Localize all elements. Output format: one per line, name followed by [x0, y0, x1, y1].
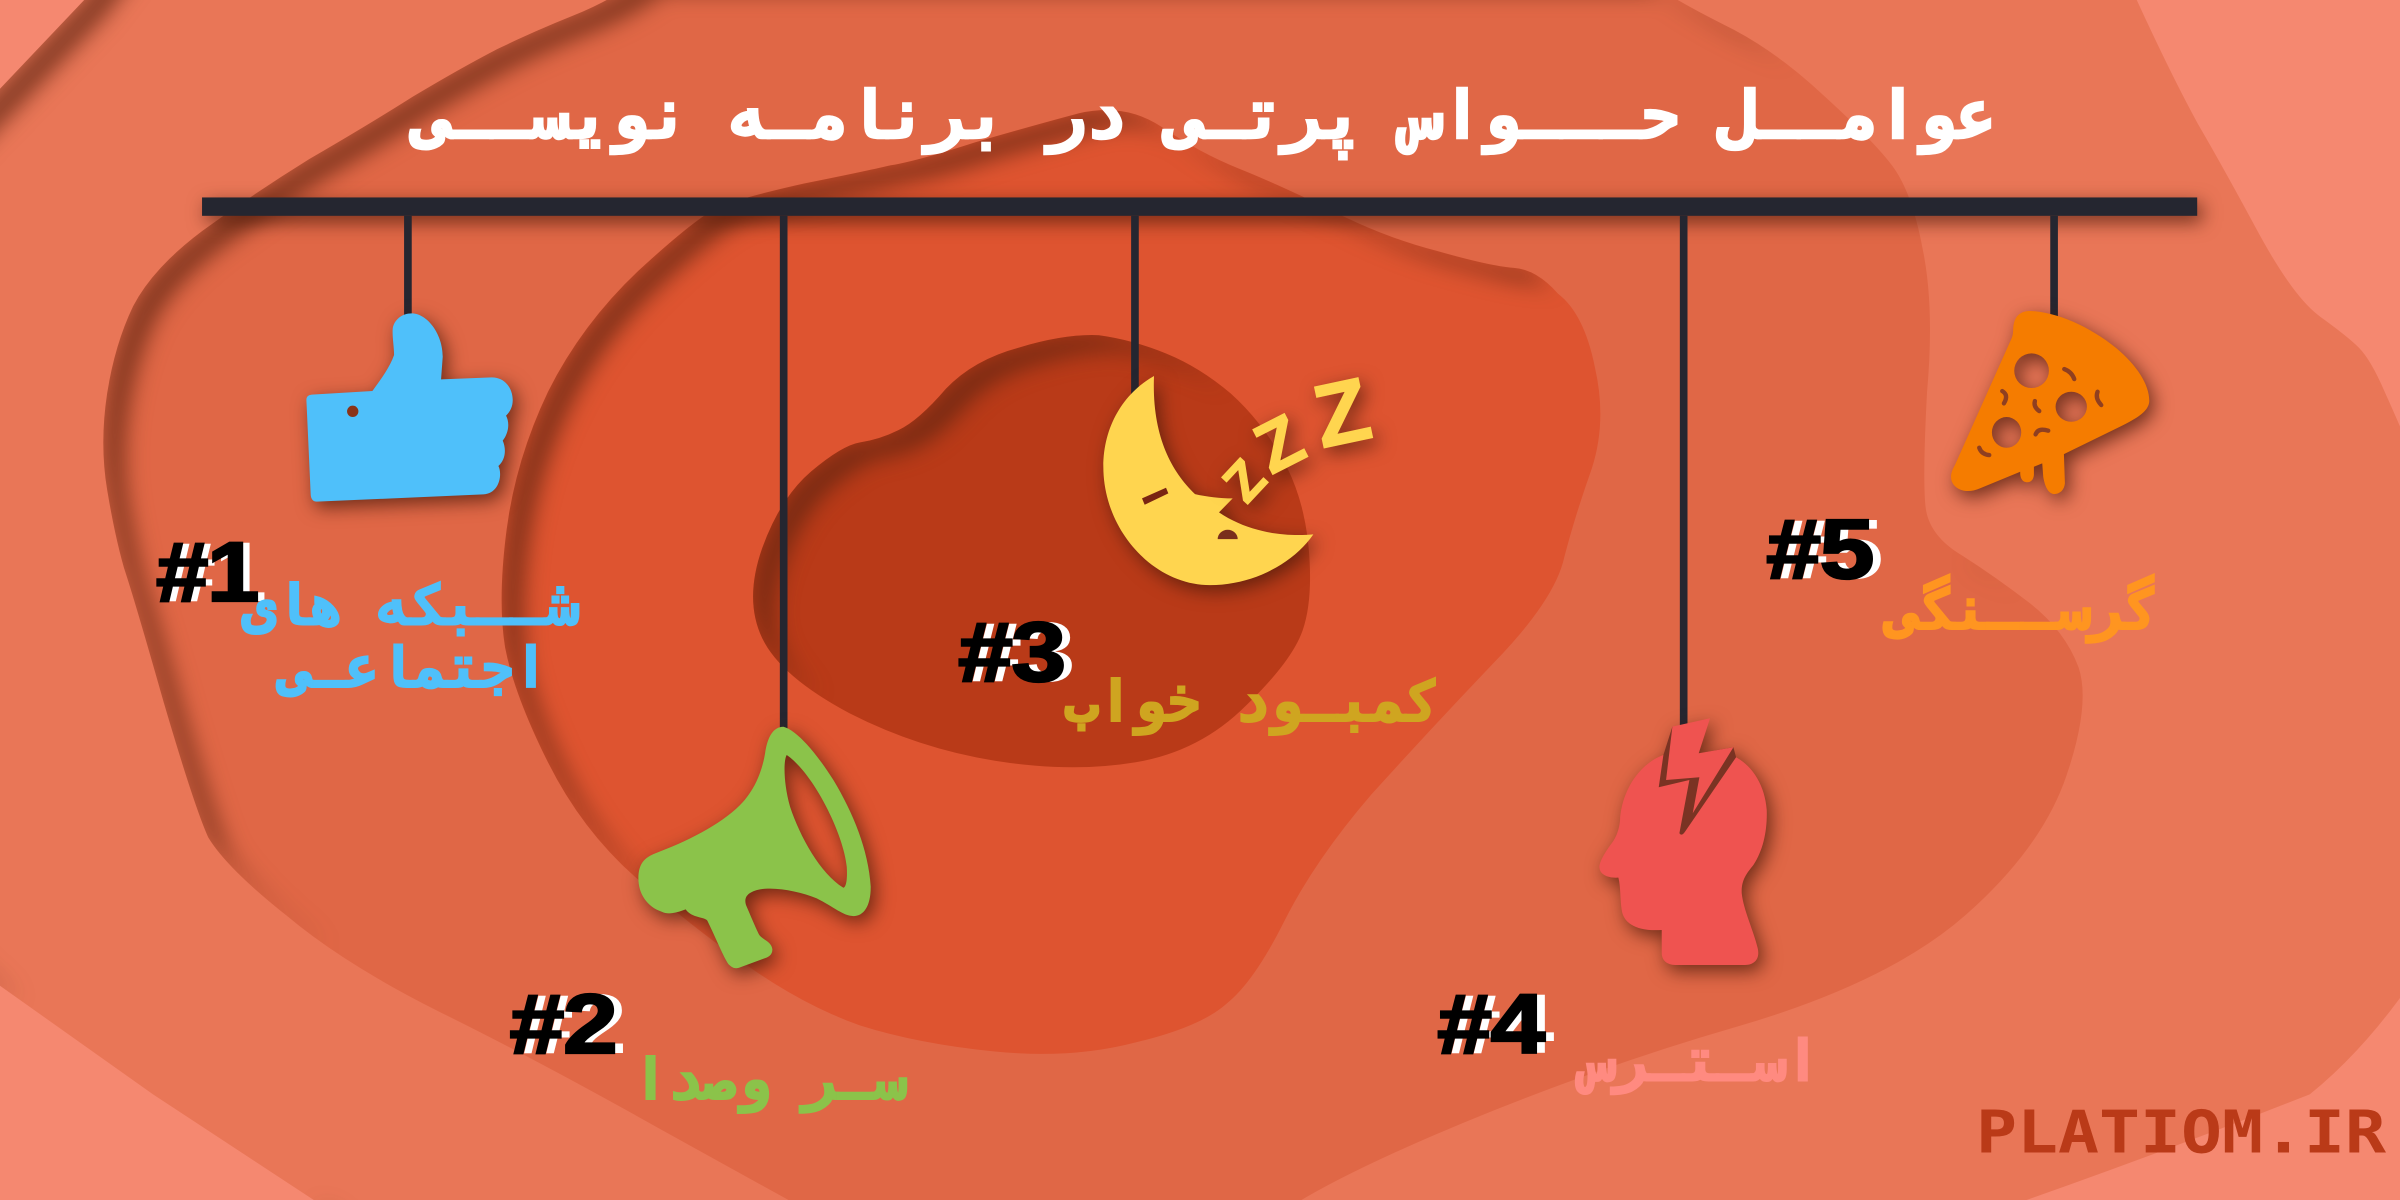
icon: thumbs up	[306, 313, 513, 502]
hanging strings	[404, 216, 2058, 729]
number 1: #1	[155, 524, 259, 619]
number 5: #5	[1765, 502, 1874, 596]
number 2: #2	[508, 978, 618, 1071]
icon: pizza slice	[1951, 311, 2149, 494]
moon crescent	[1103, 376, 1313, 585]
sleep letters: Z	[1242, 398, 1316, 488]
label 4: اسـتـرس	[1575, 1029, 1820, 1095]
hanging bar	[202, 197, 2197, 216]
label 5: گرســنگی	[1883, 574, 2158, 643]
label 1: اجتماعـی	[276, 636, 548, 701]
icon: megaphone	[638, 727, 871, 968]
number 5: #5	[1774, 502, 1884, 596]
sleep letters	[1212, 359, 1379, 513]
sleep letters: Z	[1305, 359, 1379, 467]
label 2: سـر وصدا	[634, 1047, 907, 1113]
watermark: PLATIOM.IR	[1976, 1098, 2387, 1166]
title: عوامــل حـــواس پرتـی در برنامـه نویســی	[409, 77, 1997, 160]
label 1	[242, 573, 579, 701]
panel: paper layer 4	[502, 110, 1600, 1054]
label 1: شــبکه های	[242, 573, 579, 638]
label 3: کمبـود خواب	[1065, 669, 1440, 735]
number 3: #3	[966, 606, 1075, 699]
number 3: #3	[957, 606, 1066, 699]
number 2: #2	[517, 978, 627, 1071]
icon: head with lightning	[1599, 718, 1767, 965]
number 1: #1	[162, 524, 267, 619]
sleep letters: Z	[1212, 449, 1278, 513]
number 4: #4	[1445, 978, 1555, 1071]
icon: sleeping moon	[1103, 359, 1379, 585]
panel: paper layer 5	[753, 335, 1310, 767]
number 4: #4	[1436, 978, 1545, 1071]
